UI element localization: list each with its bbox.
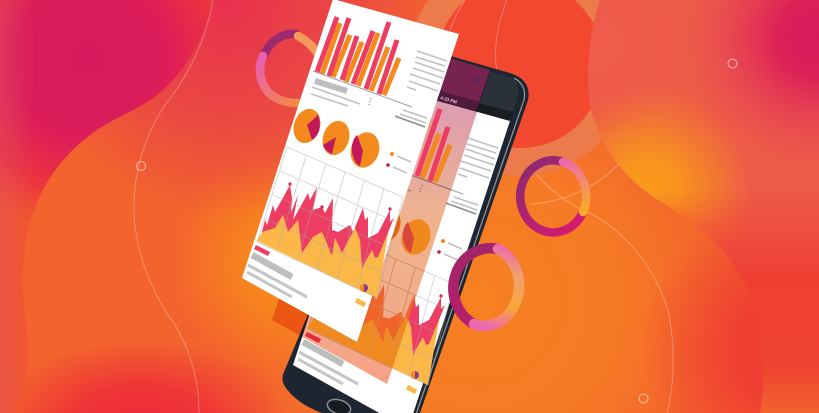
phone header (476, 72, 519, 112)
wave: top-left magenta (0, 0, 213, 413)
wave: top-right glow (588, 0, 819, 413)
phone dark strip (475, 103, 513, 121)
phone body (282, 50, 529, 413)
overlay over phone header (425, 58, 490, 111)
status time: 4:33 PM (440, 95, 458, 105)
ring chart: right (520, 160, 586, 232)
ring chart: bottom (453, 248, 519, 326)
ring chart: top left (260, 34, 318, 103)
overlay tinted screen content (308, 104, 454, 385)
phone rim highlight (416, 78, 525, 413)
phone (282, 50, 529, 413)
phone screen content (293, 86, 510, 413)
thin lines (134, 0, 673, 413)
home button (325, 397, 353, 413)
translucent overlay sheet (272, 41, 489, 384)
circle ring backdrop (408, 0, 632, 176)
floating report sheet (242, 0, 459, 342)
small circle markers (136, 59, 737, 403)
